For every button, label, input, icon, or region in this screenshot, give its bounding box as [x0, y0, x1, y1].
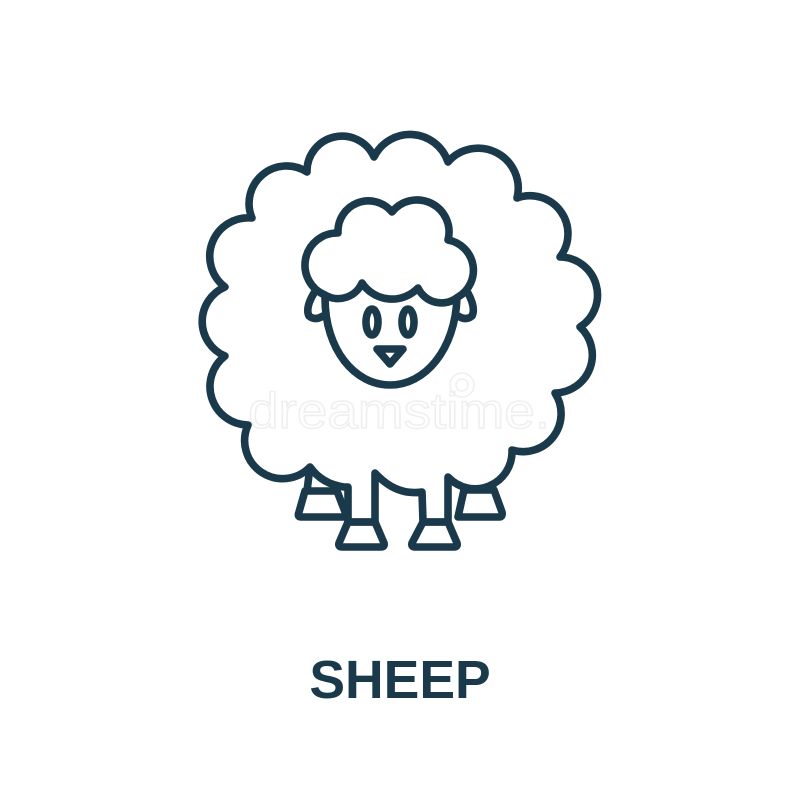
eyes — [366, 309, 414, 335]
front left foot — [339, 522, 384, 547]
title: SHEEP — [309, 651, 491, 710]
face — [325, 298, 457, 385]
ears — [308, 293, 473, 318]
head wool — [305, 200, 473, 303]
nose — [377, 349, 403, 364]
front right foot — [412, 522, 457, 547]
sheep body wool outline — [202, 134, 598, 522]
icon: sheep — [202, 134, 598, 547]
back left foot — [298, 491, 347, 517]
watermark: dreamstime. — [248, 383, 550, 439]
back right foot — [458, 490, 502, 517]
